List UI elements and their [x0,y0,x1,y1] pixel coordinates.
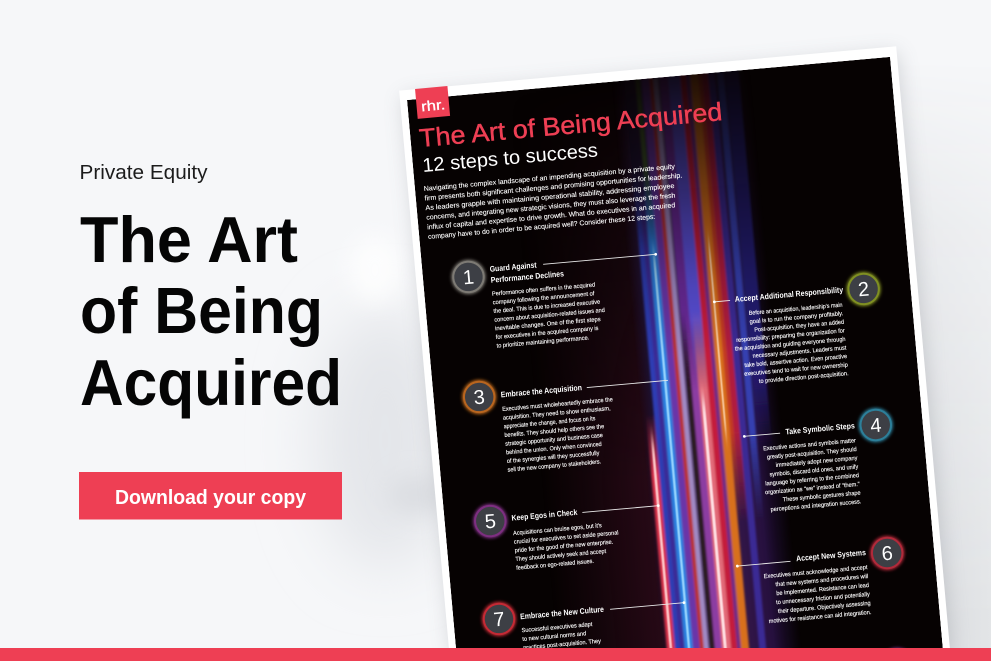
body 5: They should actively seek and accept [515,549,607,563]
body 3: Executives must wholeheartedly embrace the [502,397,614,413]
logo: rhr. [421,96,446,114]
step 1 [450,243,664,353]
body 4: organization as "we" instead of "them." [765,482,860,496]
body 7: Successful executives adapt [521,622,593,634]
main heading: Acquired [80,346,342,419]
body 3: of the synergies will they successfully [507,451,600,465]
body 1 [492,282,608,350]
body 3: appreciate the change, and focus on its [504,416,596,430]
body 2 [732,303,849,387]
intro paragraph: Navigating the complex landscape of an impending acquisition by a private equity [424,164,676,193]
body 1: to prioritize maintaining performance. [496,335,590,350]
eyebrow: category: Private Equity [80,161,208,184]
body 2: Before an acquisition, leadership's main [749,303,843,317]
body 5: pride for the good of the new enterprise. [514,540,614,554]
background [314,168,991,648]
step 2 [711,271,888,389]
step 5 [472,489,664,575]
step 4 [741,407,900,515]
body 4: symbols, discard old ones, and unify [769,464,859,478]
body 2: to provide direction post-acquisition. [759,371,849,385]
body 5 [513,522,621,572]
heading 3: Embrace the Acquisition [500,383,582,399]
body 1: Performance often suffers in the acquired [492,283,595,298]
intro paragraph: As leaders grapple with maintaining operational stability, addressing employee [425,183,675,212]
body 2: goal is to run the company profitably. [749,311,844,326]
body 7: practices post-acquisition. They [523,639,601,652]
body 2: Post-acquisition, they have an added [754,320,844,334]
bottom bar [0,648,991,661]
badge 2: 2 [857,279,870,301]
badge 5: 5 [484,511,497,534]
body 7: to new cultural norms and [522,631,586,643]
body 5: Acquisitions can bruise egos, but it's [513,523,602,537]
heading 5: Keep Egos in Check [511,508,578,523]
badge 4 [857,407,894,443]
body 3 [502,397,619,474]
badge 3 [461,379,498,415]
main heading: The Art [80,203,298,276]
body 6: Executives must acknowledge and accept [764,565,868,580]
infographic page [398,36,950,661]
body 3: strategic opportunity and business case [505,433,604,448]
connector 1 [543,253,657,266]
intro paragraph: firm presents both significant challenges and promising opportunities for leadership. [424,173,683,203]
step 3 [461,363,675,477]
connector 2 [713,299,730,303]
body 3: behind the union. Only when convinced [506,442,602,456]
badge 7: 7 [493,609,506,631]
intro paragraph: influx of capital and expertise to drive growth. What do executives in an acquired [427,202,676,231]
body 6: their departure. Objectively assessing [778,601,871,615]
body 4: immediately adopt new company [776,456,858,469]
heading 1 [489,258,565,285]
body 1: for executives in the acquired company is [496,326,599,341]
badge 5 [472,503,509,540]
connector 4 [743,432,780,438]
body 7 [521,621,601,652]
intro paragraph [424,163,686,241]
intro paragraph: concerns, and integrating new strategic visions, they must also leverage the fresh [426,193,676,222]
intro paragraph: company have to do in order to be acquired well? Consider these 12 steps: [428,214,656,241]
download button: Download your copy [115,487,307,509]
connector 7 [610,601,685,611]
logo [415,86,450,119]
heading 1: Performance Declines [490,269,565,285]
heading 4: Take Symbolic Steps [785,421,856,436]
body 2: take bold, assertive action. Even proactive [744,354,848,369]
badge 2 [845,271,882,307]
body 6: to unnecessary friction and potentially [776,592,870,606]
download button [79,472,342,520]
badge 6 [869,535,906,571]
heading 7: Embrace the New Culture [520,605,605,621]
body 5: crucial for executives to set aside personal [514,530,619,546]
body 1: concern about acquisition-related issues and [494,308,605,324]
heading 6: Accept New Systems [796,548,867,563]
step 7 [481,585,688,655]
body 4: language by referring to the combined [765,473,859,487]
heading 1: Guard Against [489,261,537,274]
badge 7 [481,601,517,637]
body 2: the acquisition and guiding everyone through [735,337,846,353]
body 2: executives tend to wait for new ownership [744,363,849,378]
body 2: necessary adjustments. Leaders must [752,345,847,360]
body 4: greatly post-acquisition. They should [767,447,857,461]
badge 6: 6 [881,543,894,565]
step 6 [734,535,910,628]
page shadow [403,52,951,661]
body 6: motives for resistance can aid integration. [769,610,872,625]
body 1: company following the announcement of [493,291,595,306]
connector 6 [736,560,791,568]
body 3: benefits. They should help others see the [504,424,605,439]
main heading: of Being [80,274,323,347]
body 4 [761,438,862,514]
badge 8 (cropped) [880,647,912,660]
body 4: These symbolic gestures shape [783,490,861,503]
connector 3 [587,380,668,388]
badge 3: 3 [473,387,486,409]
body 3: acquisition. They need to show enthusiasm, [503,406,611,422]
subtitle: 12 steps to success [421,139,599,177]
black panel with light streaks [405,37,943,661]
main heading [80,203,342,419]
body 4: perceptions and integration success. [770,499,862,513]
title: The Art of Being Acquired [418,98,723,153]
badge 1: 1 [462,266,475,289]
body 4: Executive actions and symbols matter [763,438,856,453]
white paper [399,46,950,661]
body 5: feedback on ego-related issues. [516,559,595,572]
body 1: the deal. This is due to increased executive [493,299,601,315]
body 6: that new systems and procedures will [775,574,868,588]
body 2: responsibility: preparing the organization for [736,328,845,344]
body 3: sell the new company to stakeholders. [507,459,602,474]
body 6 [764,565,872,625]
body 1: inevitable changes. One of the first steps [495,317,601,332]
connector 5 [582,504,660,514]
badge 1 [450,258,487,295]
badge 4: 4 [869,415,882,437]
body 6: be implemented. Resistance can lead [776,583,869,597]
heading 2: Accept Additional Responsibility [734,285,844,304]
